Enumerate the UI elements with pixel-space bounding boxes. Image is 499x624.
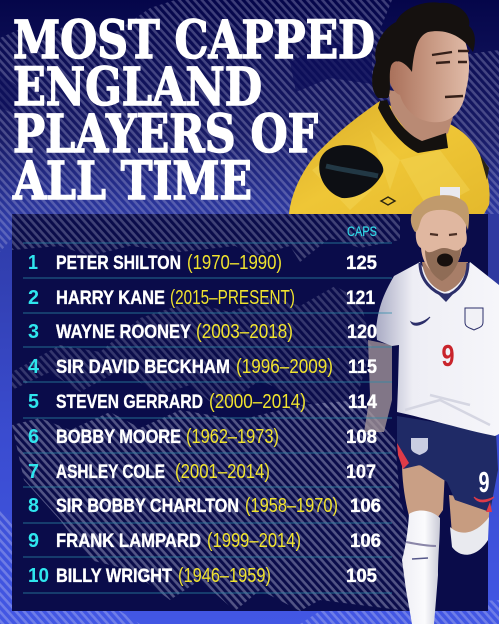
panel bbox=[12, 214, 488, 611]
England badge bbox=[465, 308, 483, 330]
black collar bbox=[378, 100, 448, 153]
row 7: (2001–2014) bbox=[175, 461, 270, 483]
row 3: (2003–2018) bbox=[196, 321, 293, 343]
row 4: 115 bbox=[348, 356, 377, 378]
row 6 bbox=[28, 426, 377, 448]
row 5: 5 bbox=[28, 391, 39, 413]
row 7: ASHLEY COLE bbox=[56, 461, 165, 483]
row 9: (1999–2014) bbox=[207, 530, 301, 552]
left faded arm bbox=[364, 340, 392, 432]
right leg skin bbox=[449, 495, 490, 535]
player photo: Peter Shilton bbox=[289, 2, 490, 214]
row 6: 6 bbox=[28, 426, 39, 448]
row 1 bbox=[28, 252, 377, 274]
shorts side stripe bbox=[397, 443, 409, 469]
row 7 bbox=[28, 461, 376, 483]
row 1: PETER SHILTON bbox=[56, 252, 181, 274]
row 10 bbox=[28, 565, 377, 587]
row 7: 107 bbox=[346, 461, 376, 483]
row 10: 105 bbox=[346, 565, 377, 587]
navy shorts bbox=[397, 416, 498, 512]
row 9 bbox=[28, 530, 381, 552]
row 8: SIR BOBBY CHARLTON bbox=[56, 495, 239, 517]
row 5: (2000–2014) bbox=[209, 391, 306, 413]
row 8: 8 bbox=[28, 495, 39, 517]
row 2: 2 bbox=[28, 287, 39, 309]
curly dark hair bbox=[372, 2, 475, 98]
neck bbox=[422, 262, 468, 292]
panel hatch lower bbox=[12, 400, 420, 611]
row 1: 1 bbox=[28, 252, 38, 274]
title: ENGLAND bbox=[13, 57, 262, 118]
shorts tick bbox=[474, 497, 494, 502]
black shoulder patch bbox=[319, 145, 383, 198]
title bbox=[12, 10, 375, 212]
row 5: STEVEN GERRARD bbox=[56, 391, 203, 413]
eyes and mouth bbox=[432, 51, 469, 97]
row 8: (1958–1970) bbox=[245, 495, 338, 517]
row 2: (2015–PRESENT) bbox=[170, 287, 295, 309]
left sock bbox=[402, 511, 440, 624]
panel hatch middle bbox=[12, 286, 372, 415]
sock stripes and tick bbox=[406, 542, 436, 546]
row 10: 10 bbox=[28, 565, 49, 587]
row 3 bbox=[28, 321, 377, 343]
row 6: BOBBY MOORE bbox=[56, 426, 181, 448]
row 6: 108 bbox=[346, 426, 377, 448]
row 5: 114 bbox=[348, 391, 377, 413]
hair bbox=[411, 195, 469, 232]
black sleeve seam bbox=[480, 155, 489, 180]
umbro logo bbox=[381, 197, 395, 205]
row 3: WAYNE ROONEY bbox=[56, 321, 191, 343]
beard bbox=[425, 248, 461, 281]
row 8: 106 bbox=[350, 495, 381, 517]
row 4: 4 bbox=[28, 356, 40, 378]
white shirt bbox=[376, 262, 499, 436]
row 9: FRANK LAMPARD bbox=[56, 530, 201, 552]
row 4: (1996–2009) bbox=[236, 356, 333, 378]
row 2: HARRY KANE bbox=[56, 287, 165, 309]
right sock bbox=[450, 517, 489, 555]
England badge bbox=[440, 187, 460, 203]
title: ALL TIME bbox=[12, 151, 252, 212]
neck bbox=[388, 90, 458, 148]
shorts number 9: 9 bbox=[478, 467, 490, 499]
row 9: 106 bbox=[350, 530, 381, 552]
row 4 bbox=[28, 356, 377, 378]
head bbox=[416, 202, 467, 276]
shirt number 9: 9 bbox=[442, 338, 454, 373]
row 7: 7 bbox=[28, 461, 39, 483]
row 2: 121 bbox=[346, 287, 375, 309]
caps column header: CAPS bbox=[347, 223, 377, 239]
row 5 bbox=[28, 391, 377, 413]
row 10: (1946–1959) bbox=[178, 565, 271, 587]
row 1: (1970–1990) bbox=[187, 252, 282, 274]
eyes bbox=[430, 234, 457, 235]
row 6: (1962–1973) bbox=[186, 426, 279, 448]
shirt folds bbox=[405, 395, 490, 425]
table bbox=[23, 223, 392, 593]
row 3: 120 bbox=[347, 321, 377, 343]
title: PLAYERS OF bbox=[13, 104, 318, 165]
row 4: SIR DAVID BECKHAM bbox=[56, 356, 230, 378]
title: MOST CAPPED bbox=[13, 10, 375, 71]
row 3: 3 bbox=[28, 321, 39, 343]
row 2 bbox=[28, 287, 375, 309]
yellow goalkeeper shirt bbox=[289, 101, 490, 214]
shirt collar bbox=[420, 263, 468, 296]
player photo: Harry Kane bbox=[364, 195, 499, 624]
left thigh skin bbox=[402, 462, 445, 520]
row 8 bbox=[28, 495, 381, 517]
row 10: BILLY WRIGHT bbox=[56, 565, 172, 587]
row 9: 9 bbox=[28, 530, 39, 552]
face bbox=[389, 30, 469, 122]
row 1: 125 bbox=[346, 252, 377, 274]
nike tick bbox=[411, 317, 430, 325]
shorts badge bbox=[411, 438, 428, 455]
panel hatch upper bbox=[12, 214, 400, 262]
open mouth bbox=[437, 254, 453, 266]
